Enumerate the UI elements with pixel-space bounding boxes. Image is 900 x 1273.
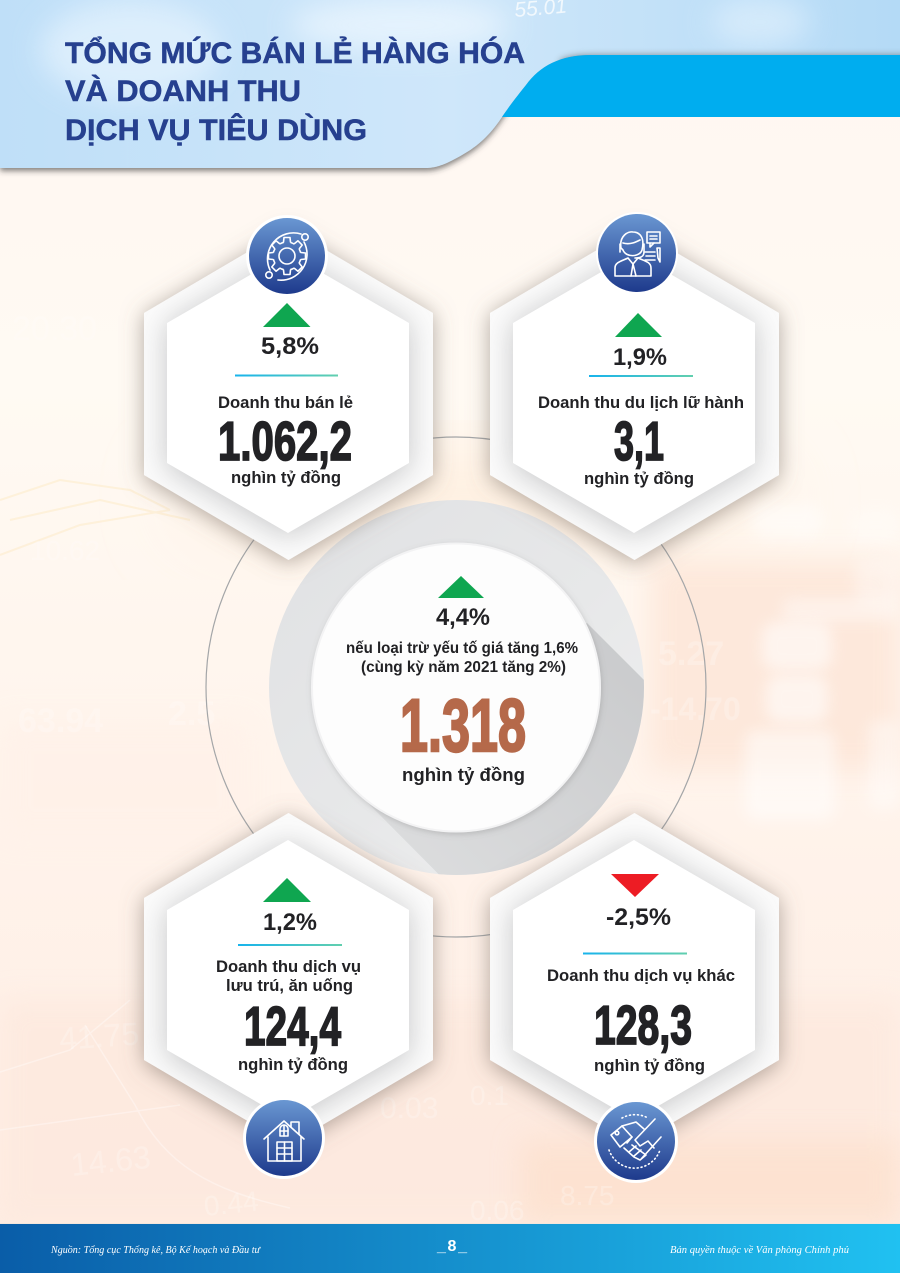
large thin ring behind centre circle — [206, 437, 706, 937]
up arrow — [615, 313, 662, 337]
growth figure: 1,9% — [613, 344, 667, 371]
footer bar — [0, 1223, 900, 1273]
background: market chart wash: 0.03 — [380, 1092, 438, 1125]
title: DỊCH VỤ TIÊU DÙNG — [65, 113, 367, 147]
label — [216, 958, 361, 995]
label: Doanh thu du lịch lữ hành — [538, 394, 744, 412]
title: TỔNG MỨC BÁN LẺ HÀNG HÓA — [65, 36, 525, 70]
divider — [235, 374, 338, 376]
change figure: -2,5% — [606, 904, 671, 931]
white inner disc — [312, 544, 600, 832]
unit: nghìn tỷ đồng — [594, 1057, 705, 1075]
title: VÀ DOANH THU — [65, 74, 301, 108]
growth figure: 1,2% — [263, 909, 317, 936]
hexagon frame — [490, 813, 779, 1145]
icon: house — [243, 1097, 325, 1179]
unit: nghìn tỷ đồng — [584, 470, 694, 488]
background: market chart wash: 5.27 — [658, 635, 724, 673]
grey outer disc with long cast shadow — [269, 500, 644, 875]
note text: (cùng kỳ năm 2021 tăng 2%) — [361, 659, 566, 676]
hexagon frame — [144, 813, 433, 1145]
header band — [0, 0, 900, 168]
value: 3,1 — [614, 410, 664, 472]
note text: nếu loại trừ yếu tố giá tăng 1,6% — [346, 640, 578, 657]
value: 1.062,2 — [218, 410, 352, 472]
cyan ribbon — [502, 55, 900, 117]
growth figure: 5,8% — [261, 333, 319, 360]
unit: nghìn tỷ đồng — [402, 765, 525, 785]
value: 124,4 — [244, 995, 341, 1057]
growth figure: 4,4% — [436, 604, 490, 631]
label: Doanh thu dịch vụ — [216, 958, 361, 976]
total value: 1.318 — [400, 684, 526, 767]
panel: accommodation and food revenue — [144, 813, 433, 1179]
background: market chart wash: 0.06 — [470, 1195, 524, 1226]
background: market chart wash: 20.30 — [12, 310, 97, 348]
label: Doanh thu bán lẻ — [218, 394, 353, 412]
note text — [346, 640, 578, 676]
unit: nghìn tỷ đồng — [238, 1056, 348, 1074]
divider — [238, 944, 342, 946]
up arrow — [438, 576, 484, 598]
divider — [583, 952, 687, 954]
hexagon frame — [490, 228, 779, 560]
background: market chart wash: 10.62 — [30, 535, 100, 566]
icon: handshake — [594, 1099, 678, 1183]
background: market chart wash: 8.75 — [560, 1180, 614, 1211]
background: market chart wash: 63.94 — [18, 702, 103, 740]
value: 128,3 — [594, 994, 692, 1056]
up arrow — [263, 878, 311, 902]
up arrow — [263, 303, 310, 327]
background: market chart wash: 41.75 — [58, 1015, 140, 1057]
panel: other services revenue — [490, 813, 779, 1183]
background: market chart wash: 14.63 — [69, 1139, 152, 1183]
unit: nghìn tỷ đồng — [231, 469, 341, 487]
panel: central total — [269, 500, 644, 875]
background: market chart wash: 2.5 — [168, 695, 215, 733]
source note: Nguồn: Tổng cục Thống kê, Bộ Kế hoạch và Đầu tư — [50, 1244, 261, 1256]
panel: travel revenue — [490, 212, 779, 560]
background: market chart wash: -14.70 — [650, 691, 741, 727]
icon: gear — [246, 215, 328, 297]
label: lưu trú, ăn uống — [226, 977, 353, 995]
page number: _8_ — [436, 1238, 468, 1255]
divider — [589, 375, 693, 377]
icon: support agent — [596, 212, 678, 294]
background: market chart wash: 0.44 — [202, 1185, 260, 1222]
background: market chart wash: 0.1 — [470, 1080, 509, 1111]
panel: retail revenue — [144, 215, 433, 560]
hexagon frame — [144, 228, 433, 560]
label: Doanh thu dịch vụ khác — [547, 967, 735, 985]
title — [65, 36, 525, 147]
sky banner — [0, 0, 900, 168]
copyright note: Bản quyền thuộc về Văn phòng Chính phủ — [670, 1244, 849, 1256]
down arrow — [611, 874, 659, 897]
